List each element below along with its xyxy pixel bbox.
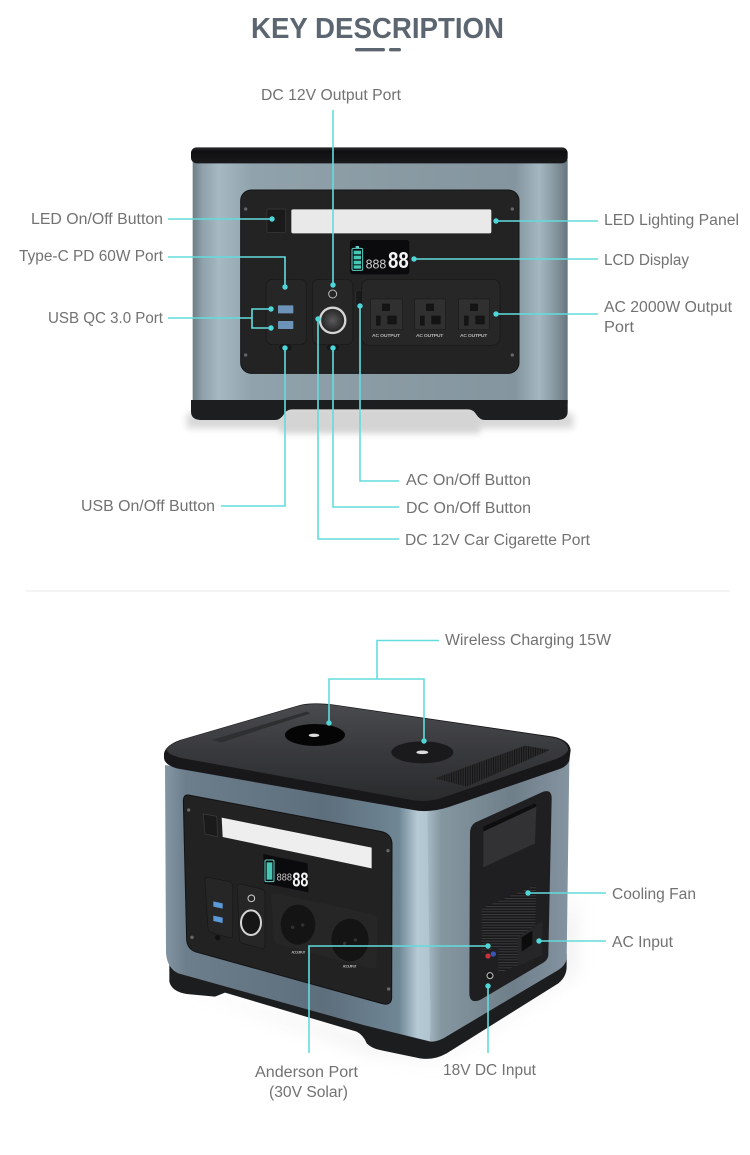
side metal face bbox=[427, 760, 569, 1042]
bottom black base bbox=[191, 400, 568, 420]
LED lighting bar bbox=[291, 209, 491, 233]
USB module bbox=[205, 877, 233, 940]
DC module bbox=[237, 884, 265, 949]
bottom black base bbox=[169, 953, 567, 1059]
front metal face bbox=[165, 765, 431, 1042]
AC input socket bbox=[522, 931, 532, 952]
right top vent bbox=[435, 746, 550, 787]
side port panel bbox=[469, 791, 552, 1001]
panel screws bbox=[187, 808, 390, 991]
labels: front view: Port bbox=[604, 319, 635, 336]
title underline bbox=[355, 48, 401, 51]
front control panel bbox=[183, 795, 392, 1004]
AC input surround bbox=[518, 922, 543, 966]
labels: front view: DC On/Off Button bbox=[406, 500, 531, 517]
LCD display bbox=[350, 240, 409, 274]
top black cap bbox=[191, 147, 568, 163]
outlet captions: AC OUTPUT bbox=[291, 950, 306, 954]
outlet captions bbox=[291, 950, 357, 968]
handle inner top bbox=[483, 804, 536, 832]
outlets module bbox=[271, 893, 377, 969]
top lip bbox=[164, 703, 571, 811]
metal body bbox=[193, 160, 568, 403]
leader lines: front view bbox=[168, 110, 598, 539]
labels: front view: LED Lighting Panel bbox=[604, 212, 739, 229]
labels: angled view: AC Input bbox=[612, 934, 674, 951]
cigarette port ring bbox=[320, 308, 345, 333]
outlet captions: AC OUTPUT bbox=[416, 333, 443, 339]
labels: front view: LED On/Off Button bbox=[31, 211, 163, 228]
labels: angled view: Cooling Fan bbox=[612, 886, 696, 903]
18V DC jack bbox=[487, 973, 493, 979]
outlet captions: AC OUTPUT bbox=[343, 964, 357, 968]
labels: angled view bbox=[255, 632, 696, 1101]
LED on/off button bbox=[267, 209, 286, 232]
labels: front view: AC 2000W Output bbox=[604, 299, 733, 316]
cooling vents bbox=[482, 885, 536, 973]
ground shadow bbox=[173, 890, 573, 1060]
outlet 2 bbox=[331, 919, 369, 961]
outlet captions: AC OUTPUT bbox=[372, 333, 400, 339]
labels: front view: DC 12V Output Port bbox=[261, 87, 402, 104]
large digits: 88 bbox=[292, 869, 308, 892]
labels: angled view: Wireless Charging 15W bbox=[445, 632, 611, 649]
panel screws bbox=[244, 207, 514, 357]
USB module bbox=[266, 279, 307, 351]
LED button bbox=[203, 814, 218, 837]
Anderson port bbox=[485, 951, 496, 959]
front view power station bbox=[187, 147, 573, 433]
battery icon bbox=[265, 860, 274, 882]
USB on/off button bbox=[279, 343, 293, 351]
title: KEY DESCRIPTION bbox=[251, 13, 504, 45]
labels: front view: LCD Display bbox=[604, 252, 689, 269]
USB ports bbox=[278, 305, 293, 313]
wireless pad 2 bbox=[391, 741, 453, 763]
outlet captions: AC OUTPUT bbox=[460, 333, 487, 339]
battery icon bbox=[352, 246, 363, 270]
left top vent bbox=[212, 712, 311, 742]
cigarette port ring bbox=[241, 910, 261, 935]
labels: front view: USB QC 3.0 Port bbox=[48, 310, 164, 327]
outlet 2 bbox=[415, 299, 445, 330]
outlet captions bbox=[372, 333, 487, 339]
AC outlets module bbox=[362, 279, 500, 345]
DC module bbox=[312, 279, 353, 351]
carry handle recess bbox=[483, 804, 536, 867]
AC on/off button bbox=[356, 290, 362, 307]
ground shadow bbox=[187, 407, 573, 433]
labels: front view: Type-C PD 60W Port bbox=[19, 248, 164, 265]
LED lighting bar bbox=[222, 818, 372, 868]
labels: front view: AC On/Off Button bbox=[406, 472, 531, 489]
LCD display bbox=[263, 854, 308, 892]
outlet 1 bbox=[371, 299, 402, 330]
DC on/off button bbox=[326, 343, 340, 351]
outlet 3 bbox=[459, 299, 489, 330]
labels: angled view: Anderson Port bbox=[255, 1064, 359, 1081]
labels: angled view: (30V Solar) bbox=[269, 1084, 348, 1101]
angled view power station bbox=[164, 703, 573, 1060]
wireless pad 1 bbox=[285, 724, 345, 746]
labels: front view: USB On/Off Button bbox=[81, 498, 215, 515]
large LCD digits: 88 bbox=[388, 247, 409, 273]
Type-C port bbox=[215, 935, 220, 940]
DC port icon bbox=[329, 290, 337, 298]
small LCD digits: 888 bbox=[366, 257, 386, 271]
outlet 1 bbox=[281, 905, 315, 945]
DC port icon bbox=[248, 895, 255, 902]
top surface bbox=[167, 704, 568, 801]
small digits: 888 bbox=[277, 873, 292, 884]
leader lines: angled view bbox=[309, 640, 606, 1053]
labels: front view bbox=[19, 87, 739, 549]
labels: front view: DC 12V Car Cigarette Port bbox=[405, 532, 591, 549]
labels: angled view: 18V DC Input bbox=[443, 1062, 537, 1079]
USB ports bbox=[213, 901, 223, 909]
front control panel bbox=[241, 190, 519, 373]
